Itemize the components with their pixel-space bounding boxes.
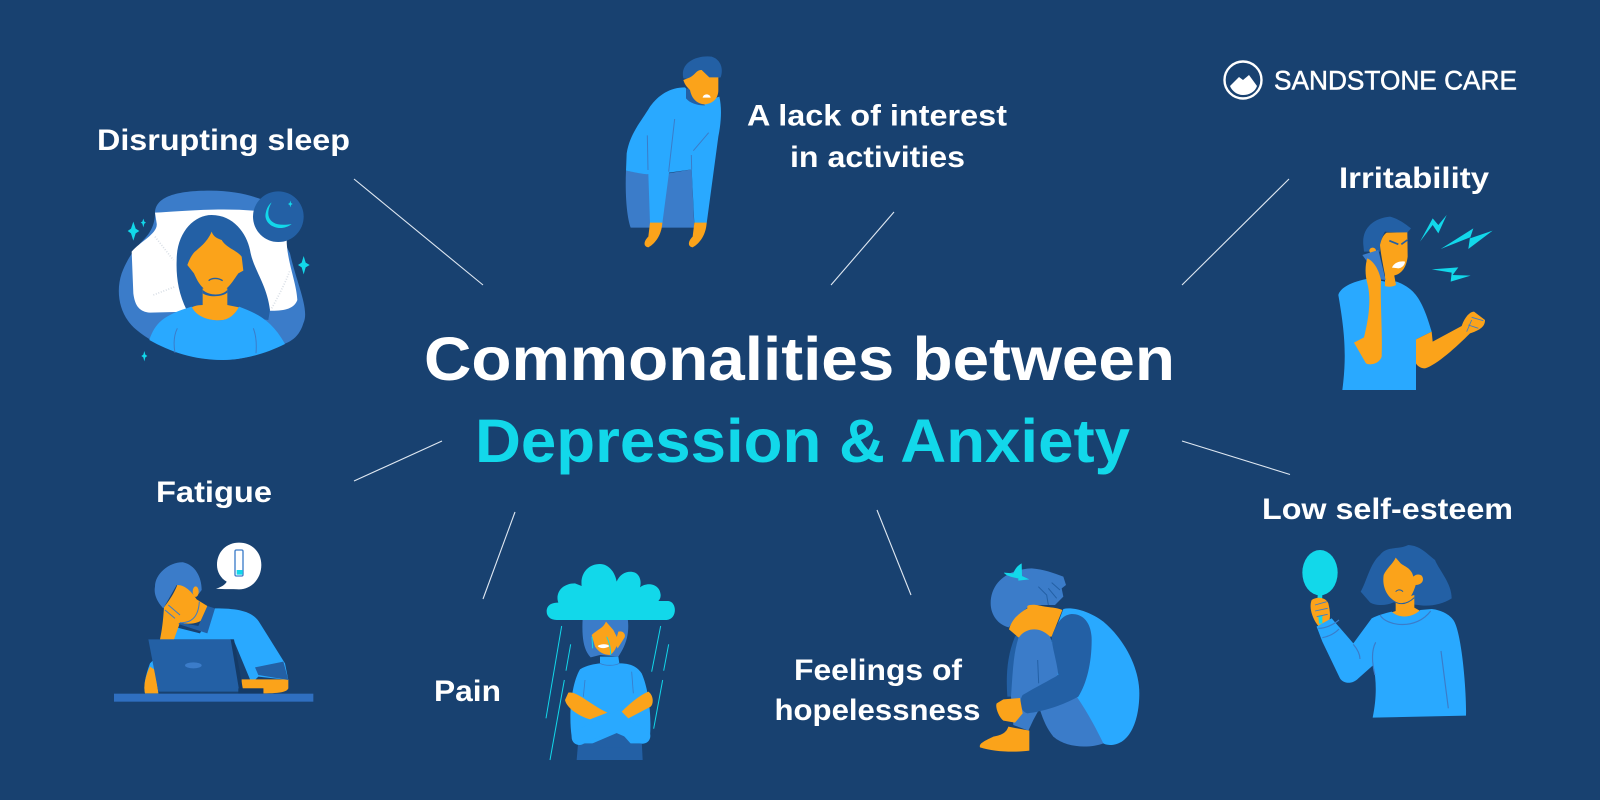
label: Feelings of hopelessness: Feelings of [794, 654, 962, 687]
label: Pain: Pain [434, 675, 501, 708]
title: Commonalities between [424, 325, 1175, 393]
title [424, 325, 1175, 475]
illustration: tired person at laptop [114, 543, 313, 702]
illustration: crying person under rain cloud [546, 564, 675, 760]
label: Irritability: Irritability [1339, 162, 1490, 195]
illustration: woman awake on pillow with moon [119, 191, 310, 361]
logo: Sandstone Care: SANDSTONE CARE [1274, 66, 1517, 96]
label: A lack of interest in activities: A lack of interest [747, 100, 1007, 132]
illustration: woman holding hand mirror [1302, 545, 1466, 718]
illustration: man slumped, lack of interest [626, 56, 722, 247]
label: Low self-esteem: Low self-esteem [1262, 493, 1513, 526]
illustration: person curled up hugging knees [980, 563, 1139, 752]
label: Feelings of hopelessness: hopelessness [774, 694, 980, 727]
illustration: angry man on phone [1338, 215, 1493, 390]
label: Feelings of hopelessness [774, 654, 980, 727]
title: Depression & Anxiety [475, 407, 1130, 475]
label: A lack of interest in activities: in activities [790, 141, 965, 174]
label: Disrupting sleep: Disrupting sleep [97, 124, 350, 157]
label: Fatigue: Fatigue [156, 476, 272, 509]
logo: Sandstone Care [1224, 62, 1517, 98]
label: A lack of interest in activities [747, 100, 1007, 174]
